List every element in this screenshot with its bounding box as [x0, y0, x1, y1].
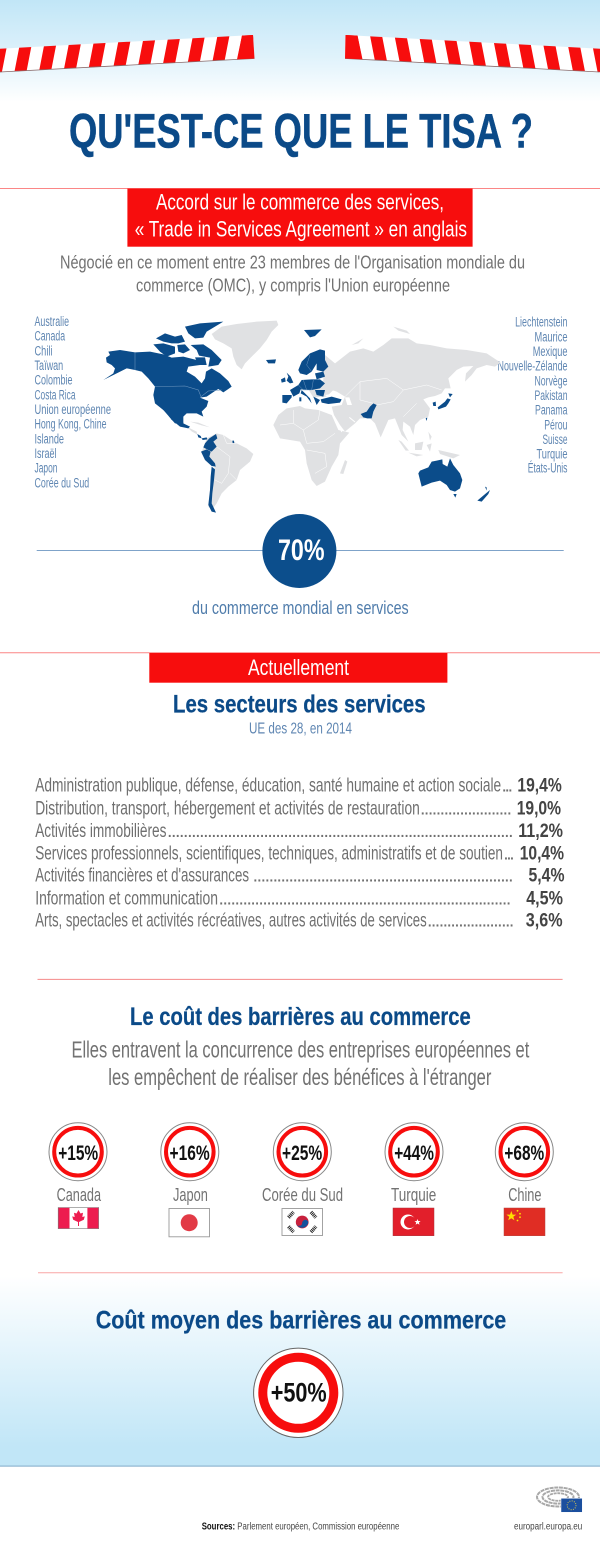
- sector list: .........................................................................: [218, 887, 511, 909]
- country list right: Liechtenstein: [515, 315, 568, 330]
- sector list: .......................: [420, 797, 512, 819]
- sector list: ...: [502, 775, 513, 797]
- circle 70%: [262, 514, 336, 588]
- country cost: Turkey: [385, 1123, 443, 1236]
- country cost: Canada: +15%: [58, 1142, 98, 1165]
- sector list: ......................................................................................: [167, 820, 514, 842]
- country list right: États-Unis: [528, 461, 568, 476]
- red banner: actuellement: [149, 653, 447, 683]
- country list left: Canada: [34, 329, 65, 344]
- country list left: Chili: [34, 343, 52, 358]
- sector list: 5,4%: [528, 865, 564, 887]
- sources: Sources: Parlement européen, Commission européenne: [202, 1521, 400, 1532]
- country list left: Corée du Sud: [34, 475, 89, 490]
- country list left: Islande: [34, 431, 64, 446]
- country cost: South Korea: [262, 1123, 343, 1236]
- intro text: commerce (OMC), y compris l'Union européenne: [136, 274, 450, 295]
- country cost: China: [495, 1123, 553, 1236]
- map: South and Central America, Greenland: [162, 321, 278, 514]
- stat caption: du commerce mondial en services: [192, 597, 409, 618]
- heading: cost of barriers: Le coût des barrières au commerce: [130, 1003, 471, 1031]
- subheading: UE des 28, en 2014: [249, 720, 352, 737]
- European Parliament logo: [537, 1488, 582, 1512]
- country cost: Japan: +16%: [170, 1142, 210, 1165]
- country list left: Japon: [34, 461, 58, 476]
- country list left: Australie: [34, 314, 69, 329]
- country list right: Suisse: [542, 432, 568, 447]
- country list right: Pakistan: [534, 388, 568, 403]
- flag: South Korea: [282, 1208, 322, 1236]
- sector list: 19,4%: [517, 775, 562, 797]
- country cost: China: +68%: [504, 1142, 544, 1165]
- flag: Turkey: [393, 1208, 434, 1236]
- country list left: Taïwan: [34, 358, 63, 373]
- country list right: Turquie: [536, 447, 568, 462]
- country cost: Canada: [49, 1123, 107, 1229]
- sector list: Activités immobilières: [35, 820, 167, 842]
- red banner: actuellement: Actuellement: [248, 655, 349, 680]
- top sky gradient: [0, 0, 600, 102]
- barrier right: [345, 35, 600, 72]
- sector list: ...: [503, 842, 515, 864]
- sector list: 10,4%: [520, 842, 564, 864]
- country list right: [498, 315, 568, 476]
- red banner: definition: [127, 188, 473, 247]
- sector list: Information et communication: [35, 887, 218, 909]
- country cost: China: Chine: [508, 1184, 542, 1205]
- map: Europe and Turkey: [281, 349, 342, 405]
- country list left: [34, 314, 111, 490]
- country list left: Union européenne: [34, 402, 111, 417]
- value 70%: 70%: [278, 534, 324, 567]
- country cost: Japan: [161, 1123, 219, 1237]
- flag: Canada: [58, 1208, 99, 1229]
- country list right: Maurice: [534, 329, 568, 344]
- country list right: Panama: [535, 403, 568, 418]
- red banner: definition: Accord sur le commerce des services,: [156, 190, 444, 214]
- country cost: Turkey: +44%: [394, 1142, 434, 1165]
- bottom sky gradient: [0, 1276, 600, 1466]
- map: North America: [103, 322, 232, 423]
- country list left: Israël: [34, 446, 56, 461]
- sector list: ......................: [427, 910, 514, 932]
- divider with 70% stat: [37, 514, 564, 588]
- heading: sectors: Les secteurs des services: [173, 691, 426, 719]
- country list left: Costa Rica: [34, 387, 76, 402]
- footer rule: [0, 1466, 600, 1467]
- sector list: 11,2%: [518, 820, 563, 842]
- average cost sign: [254, 1348, 343, 1438]
- heading: average cost: Coût moyen des barrières au commerce: [96, 1306, 506, 1334]
- flag: Japan: [169, 1208, 210, 1237]
- country cost: South Korea: +25%: [282, 1142, 322, 1165]
- country cost: Turkey: Turquie: [391, 1184, 436, 1205]
- sector list: Distribution, transport, hébergement et activités de restauration: [35, 797, 420, 819]
- world map: [103, 321, 501, 514]
- sector list: [35, 775, 564, 932]
- country list right: Pérou: [544, 417, 568, 432]
- sector list: 19,0%: [517, 797, 561, 819]
- red banner: definition: « Trade in Services Agreement » en anglais: [135, 217, 467, 242]
- country cost: Japan: Japon: [173, 1184, 208, 1205]
- website: europarl.europa.eu: [514, 1521, 582, 1532]
- sector list: 3,6%: [526, 910, 563, 932]
- country list left: Colombie: [34, 373, 72, 388]
- intro text: [60, 252, 525, 295]
- sector list: 4,5%: [526, 887, 563, 909]
- country list right: Norvège: [534, 373, 568, 388]
- flag: China: [504, 1208, 545, 1236]
- country list left: Hong Kong, Chine: [34, 417, 106, 432]
- sector list: Arts, spectacles et activités récréatives, autres activités de services: [35, 910, 427, 932]
- country list right: Mexique: [533, 344, 568, 359]
- sector list: Activités financières et d'assurances: [35, 865, 249, 887]
- map: Eurasia, Africa, Oceania: [266, 327, 501, 502]
- barrier left: [0, 35, 254, 72]
- country cost: Canada: Canada: [57, 1184, 101, 1205]
- sector list: .................................................................: [253, 865, 514, 887]
- average cost sign: +50%: [271, 1378, 327, 1408]
- barriers description: [72, 1037, 530, 1090]
- country cost: South Korea: Corée du Sud: [262, 1184, 343, 1205]
